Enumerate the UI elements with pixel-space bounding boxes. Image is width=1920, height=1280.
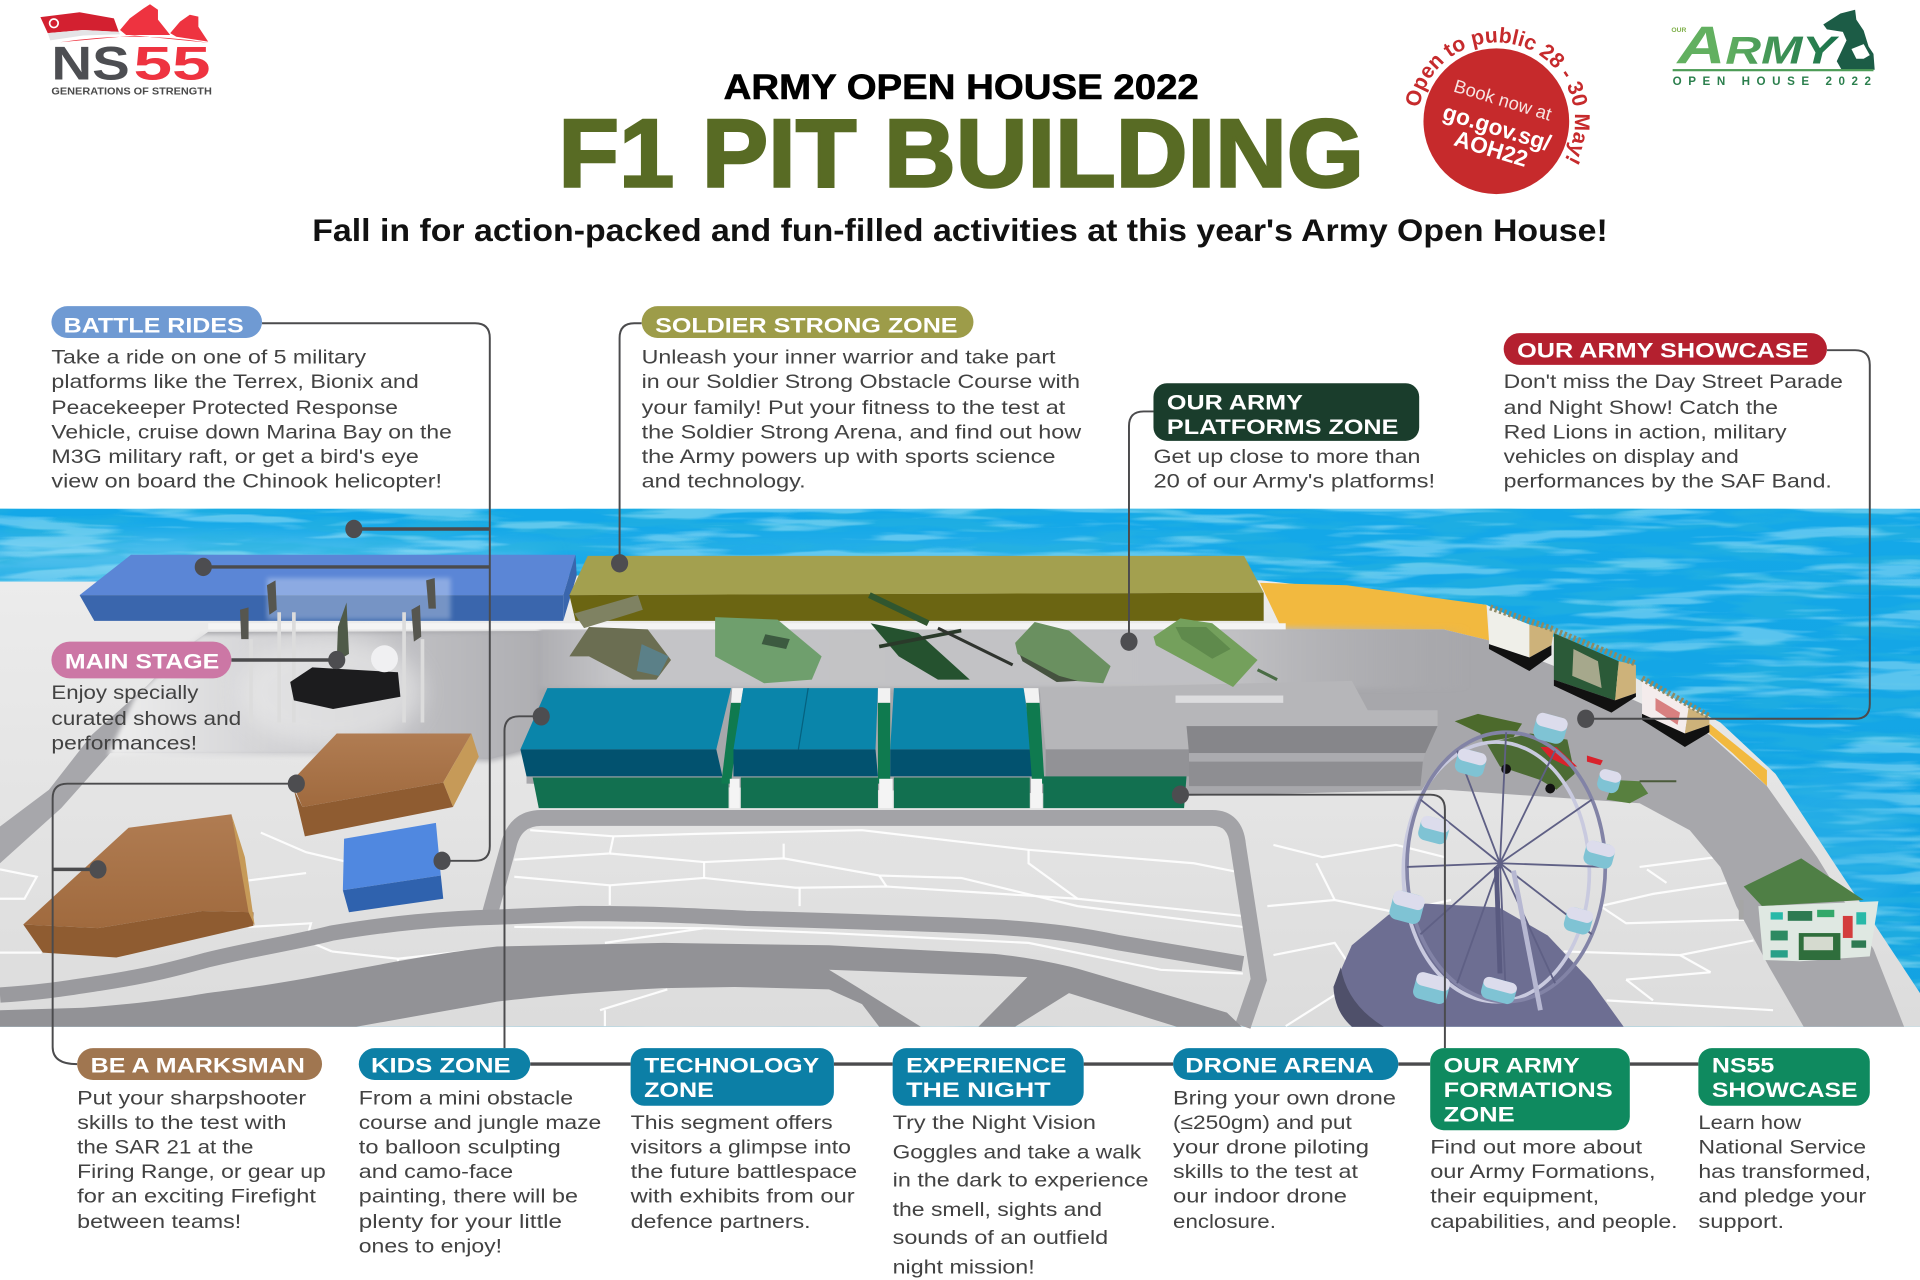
description: has transformed, [1698,1161,1871,1183]
map: event site illustration [0,509,1920,1027]
description [893,1112,1149,1278]
heading pill: BATTLE RIDES [64,313,244,337]
panel: our army platforms zone [1153,383,1435,492]
badge: booking information: Book now at [1451,75,1554,125]
description: curated shows and [51,708,241,730]
description: Find out more about [1430,1136,1643,1158]
description: Learn how [1698,1112,1802,1134]
heading pill [77,1048,322,1080]
description [1698,1112,1871,1233]
blocks: grey formations buildings [1040,681,1438,808]
description: with exhibits from our [629,1185,855,1207]
logo: NS55: 55 [133,37,211,90]
description [629,1112,857,1233]
description: view on board the Chinook helicopter! [51,470,442,492]
description [642,347,1082,492]
description: performances! [51,732,197,754]
description [359,1087,601,1258]
description: in the dark to experience [893,1170,1149,1192]
heading pill [1153,383,1419,441]
heading pill: OUR ARMY SHOWCASE [1517,339,1809,363]
panel: technology zone [629,1048,857,1233]
description: National Service [1698,1136,1866,1158]
booth: NS55 showcase [1739,858,1878,961]
description: the smell, sights and [893,1199,1102,1221]
panel: experience the night [893,1048,1149,1278]
heading pill: OUR ARMY [1167,391,1303,415]
description: our indoor drone [1173,1185,1347,1207]
description: course and jungle maze [359,1112,601,1134]
logo: Our Army Open House 2022: OPEN HOUSE 2022 [1673,75,1871,88]
subtitle: Fall in for action-packed and fun-filled activities at this year's Army Open House! [312,212,1608,248]
description: This segment offers [631,1112,833,1134]
heading pill: EXPERIENCE [906,1054,1067,1078]
description: skills to the test with [77,1112,287,1134]
block: kids blue [343,823,443,912]
cabins [1388,711,1622,1006]
heading pill [1430,1048,1630,1130]
description [77,1087,326,1233]
panel: our army formations zone [1430,1048,1678,1233]
description: and pledge your [1698,1185,1867,1207]
description: the SAR 21 at the [77,1136,254,1158]
connector: our army showcase [1577,350,1870,728]
ferris wheel: experience the night / drone arena [1333,711,1676,1027]
heading pill [631,1048,834,1106]
grey road network [0,623,1904,1027]
heading pill: TECHNOLOGY [644,1054,819,1078]
description: From a mini obstacle [359,1087,573,1109]
heading pill: KIDS ZONE [371,1054,511,1078]
heading pill: THE NIGHT [906,1078,1051,1102]
description [1504,371,1843,492]
armoured truck [715,617,822,683]
description [1430,1136,1678,1233]
description: our Army Formations, [1430,1161,1656,1183]
description: between teams! [77,1211,241,1233]
heading pill: ZONE [644,1078,714,1102]
connector: soldier strong zone [611,323,642,572]
description: (≤250gm) and put [1173,1112,1352,1134]
logo: NS55: GENERATIONS OF STRENGTH [51,85,212,97]
description: Bring your own drone [1173,1087,1396,1109]
stage puck [290,667,400,709]
description: Don't miss the Day Street Parade [1504,371,1843,393]
description: their equipment, [1430,1185,1599,1207]
description: platforms like the Terrex, Bionix and [51,371,419,393]
panel: battle rides [51,306,452,492]
block: soldier strong arena [569,556,1264,621]
description: ones to enjoy! [359,1236,502,1258]
description: Put your sharpshooter [77,1087,307,1109]
helicopter [869,595,1013,680]
armoured carrier [1015,622,1111,683]
description: the Soldier Strong Arena, and find out how [642,421,1082,443]
title: F1 Pit Building: F1 PIT BUILDING [558,100,1364,208]
description: Try the Night Vision [893,1112,1096,1134]
badge: booking information: Open to public 28 - 30 May! [1406,27,1590,165]
description [51,347,452,492]
description: Vehicle, cruise down Marina Bay on the [51,421,452,443]
flag and saluting soldiers [40,4,209,43]
tank [1153,618,1277,687]
description: for an exciting Firefight [77,1185,317,1207]
description [1173,1087,1396,1233]
logo: Our Army Open House 2022: RMY [1725,30,1840,73]
description: enclosure. [1173,1211,1276,1233]
heading pill [1173,1048,1398,1080]
logo: Our Army Open House 2022: A [1675,17,1725,76]
block: battle rides blue [80,555,577,621]
heading pill: SOLDIER STRONG ZONE [655,313,958,337]
description: Unleash your inner warrior and take part [642,347,1056,369]
panel: NS55 showcase [1698,1048,1871,1233]
heading pill [642,306,973,338]
logo: NS55: NS [51,37,130,90]
blocks: technology and kids zones [520,688,1044,808]
description: vehicles on display and [1504,446,1739,468]
description: 20 of our Army's platforms! [1153,470,1435,492]
description: Firing Range, or gear up [77,1161,326,1183]
heading pill: PLATFORMS ZONE [1167,415,1398,439]
description: plenty for your little [359,1211,562,1233]
parked tanks [1455,714,1676,803]
heading pill [51,642,231,678]
heading pill [359,1048,530,1080]
blocks: be a marksman firing range [23,733,479,958]
logo: Our Army Open House 2022 [1671,10,1875,88]
badge: booking information: go.gov.sg/ [1440,98,1555,156]
heading pill: FORMATIONS [1444,1078,1613,1102]
connector: our army platforms zone [1120,411,1153,651]
description: in our Soldier Strong Obstacle Course with [642,371,1080,393]
description [1153,446,1435,492]
connector: our army formations [1172,786,1445,1048]
description: to balloon sculpting [359,1136,561,1158]
heading pill: OUR ARMY [1444,1054,1580,1078]
heading pill: DRONE ARENA [1185,1054,1374,1078]
panel: be a marksman [77,1048,326,1233]
panel: drone arena [1173,1048,1398,1233]
heading pill: NS55 [1712,1054,1774,1078]
description: painting, there will be [359,1185,578,1207]
logo: Our Army Open House 2022: OUR [1671,27,1687,34]
description: capabilities, and people. [1430,1211,1678,1233]
yellow waterfront strip [1260,583,1489,640]
heading pill: BE A MARKSMAN [91,1054,305,1078]
main stage [240,578,451,722]
heading pill: MAIN STAGE [65,650,219,674]
description: your family! Put your fitness to the test at [642,397,1066,419]
badge: booking information: AOH22 [1451,125,1531,172]
description: skills to the test at [1173,1161,1359,1183]
sea [0,509,1920,1027]
heading pill: SHOWCASE [1712,1078,1858,1102]
title: Army Open House 2022: ARMY OPEN HOUSE 2022 [724,67,1199,107]
description: visitors a glimpse into [631,1136,851,1158]
land [0,576,1920,1027]
heading pill [1698,1048,1870,1106]
connector: be a marksman [53,774,305,1064]
description: and Night Show! Catch the [1504,397,1778,419]
description: and technology. [642,470,806,492]
description: Goggles and take a walk [893,1141,1141,1163]
panel: main stage [51,642,241,754]
heading pill [893,1048,1084,1106]
logo: NS55 [40,4,212,97]
description: Enjoy specially [51,682,199,704]
description: the Army powers up with sports science [642,446,1056,468]
description: Take a ride on one of 5 military [51,347,366,369]
heading pill [51,306,262,338]
billboards: our army showcase [1489,607,1709,747]
panel: our army showcase [1504,333,1843,492]
description: sounds of an outfield [893,1227,1108,1249]
heading pill: ZONE [1444,1103,1515,1127]
panel: kids zone [359,1048,601,1258]
description: Peacekeeper Protected Response [51,397,398,419]
description: support. [1698,1211,1784,1233]
launcher truck [569,595,671,680]
scaffold towers [240,578,451,722]
connector: battle rides [195,323,490,870]
heading pill [1504,333,1827,365]
description: the future battlespace [631,1161,857,1183]
description [51,682,241,754]
description: Get up close to more than [1153,446,1420,468]
description: performances by the SAF Band. [1504,470,1832,492]
description: Red Lions in action, military [1504,421,1787,443]
description: and camo-face [359,1161,513,1183]
panel: soldier strong zone [642,306,1082,492]
description: night mission! [893,1256,1035,1278]
vehicles: army platforms [569,595,1277,687]
description: defence partners. [631,1211,811,1233]
description: M3G military raft, or get a bird's eye [51,446,419,468]
description: your drone piloting [1173,1136,1369,1158]
soldier silhouette [1823,10,1875,70]
paving lines [0,830,1773,1026]
connector: kids zone and technology row [504,707,1698,1064]
connector: main stage [231,651,345,669]
